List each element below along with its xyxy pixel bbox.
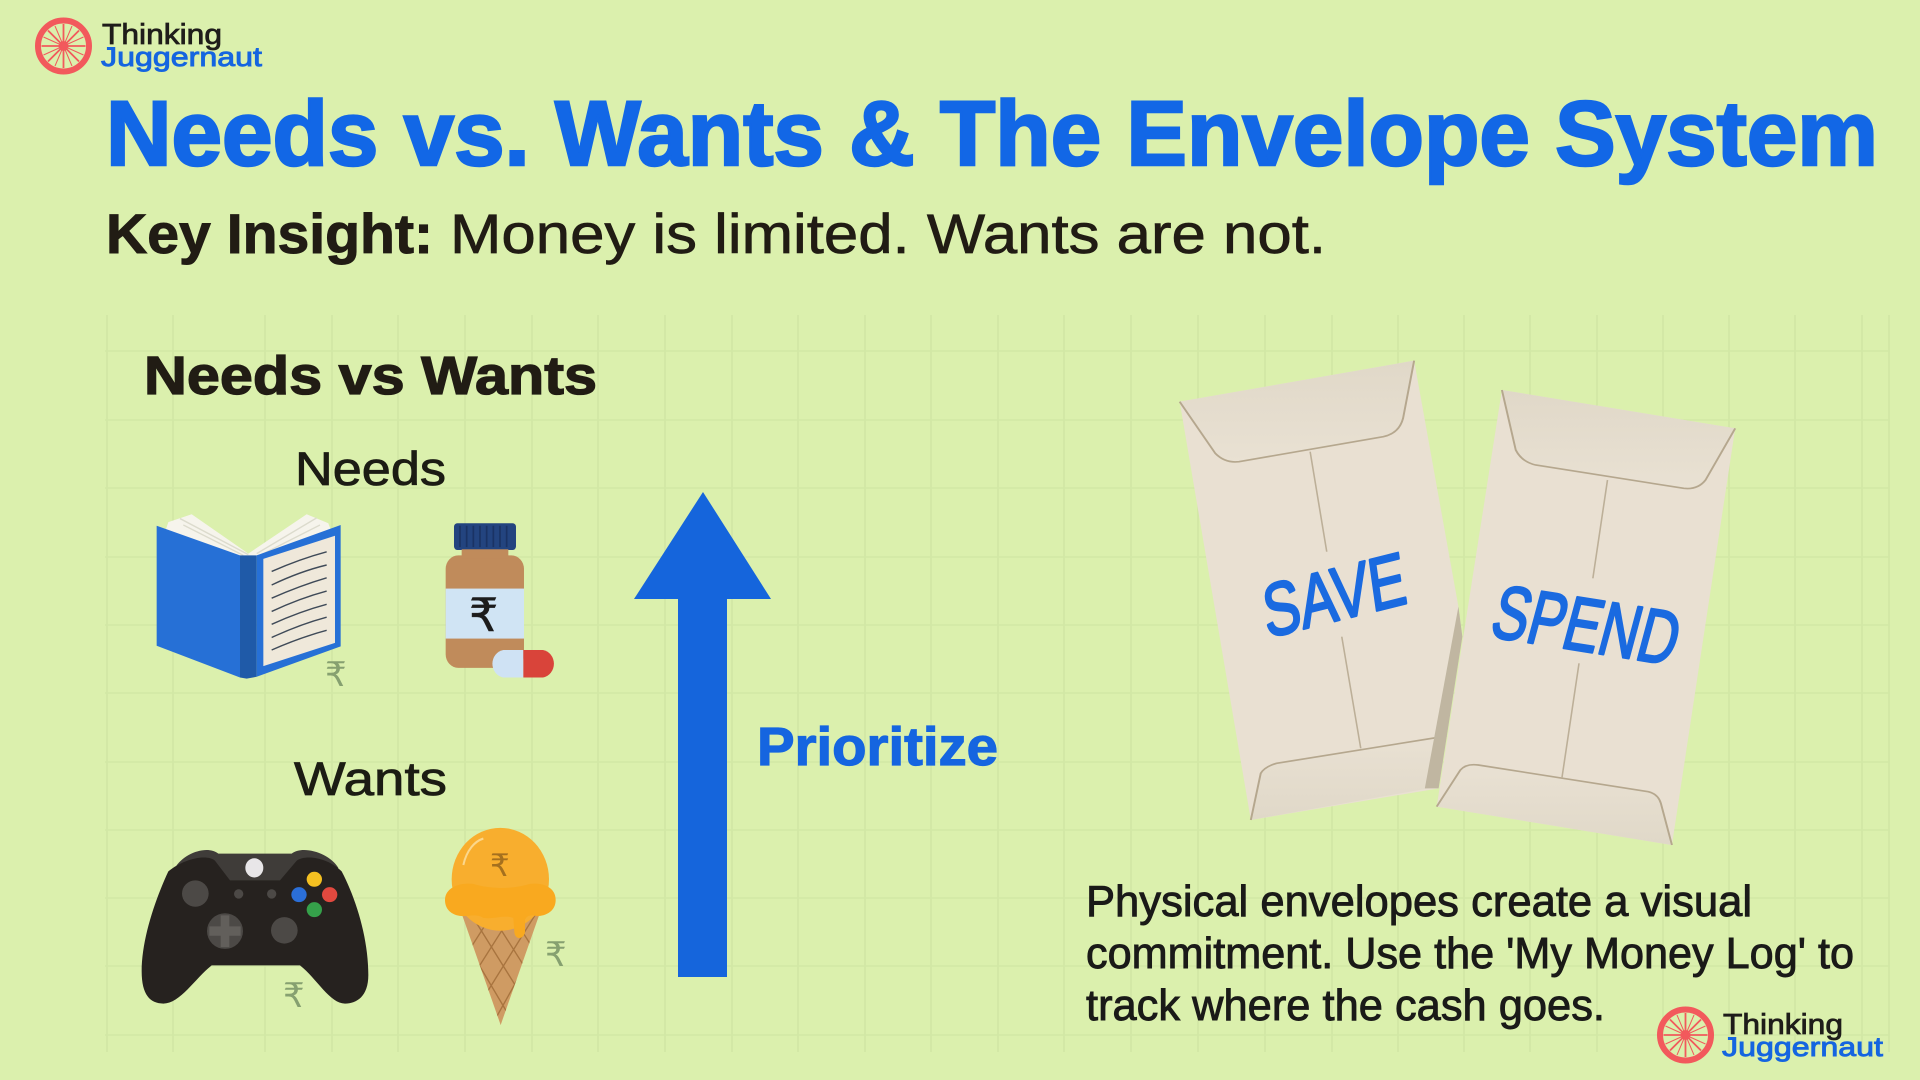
arrow label: Prioritize: Prioritize — [757, 717, 998, 777]
arrow: prioritize upward — [634, 492, 771, 977]
logo wordmark: Thinking: Thinking — [1723, 1009, 1843, 1041]
icon: game controller — [142, 850, 368, 1004]
section heading: Needs vs Wants: Needs vs Wants — [144, 346, 597, 406]
logo wordmark: Thinking: Thinking — [102, 19, 222, 51]
envelope label: SAVE: SAVE — [1258, 536, 1411, 654]
rupee mark on ice cream: ₹ — [490, 848, 510, 883]
rupee mark near ice cream: ₹ — [545, 936, 567, 974]
icon: book — [157, 514, 341, 679]
envelope label: SPEND: SPEND — [1484, 570, 1689, 682]
text block: envelope explanation: track where the cash goes. — [1086, 981, 1605, 1030]
logo wordmark: Juggernaut: Juggernaut — [101, 42, 263, 72]
rupee mark on bottle: ₹ — [469, 589, 498, 641]
text block: envelope explanation — [1086, 877, 1854, 1030]
icon: wheel — [1660, 1010, 1711, 1060]
rupee mark near controller: ₹ — [283, 977, 305, 1015]
icon: wheel — [38, 20, 89, 72]
illustration: save envelope — [1180, 361, 1462, 820]
key insight label: Key Insight: — [106, 202, 433, 265]
text block: envelope explanation: commitment. Use the 'My Money Log' to — [1086, 929, 1854, 978]
title: Needs vs. Wants & The Envelope System — [106, 83, 1878, 185]
key insight text: Money is limited. Wants are not. — [450, 202, 1326, 265]
pill — [492, 650, 554, 677]
logo wordmark: Juggernaut: Juggernaut — [1722, 1032, 1884, 1062]
text block: envelope explanation: Physical envelopes create a visual — [1086, 877, 1752, 926]
logo: bottom right — [1660, 1009, 1884, 1062]
subheading: Needs: Needs — [295, 442, 446, 495]
subheading: Wants: Wants — [294, 752, 447, 805]
rupee mark near book: ₹ — [325, 656, 347, 694]
icon: medicine bottle — [446, 523, 554, 677]
illustration: spend envelope — [1437, 390, 1735, 845]
logo: top left — [38, 19, 263, 72]
icon: ice cream cone — [445, 828, 557, 1036]
